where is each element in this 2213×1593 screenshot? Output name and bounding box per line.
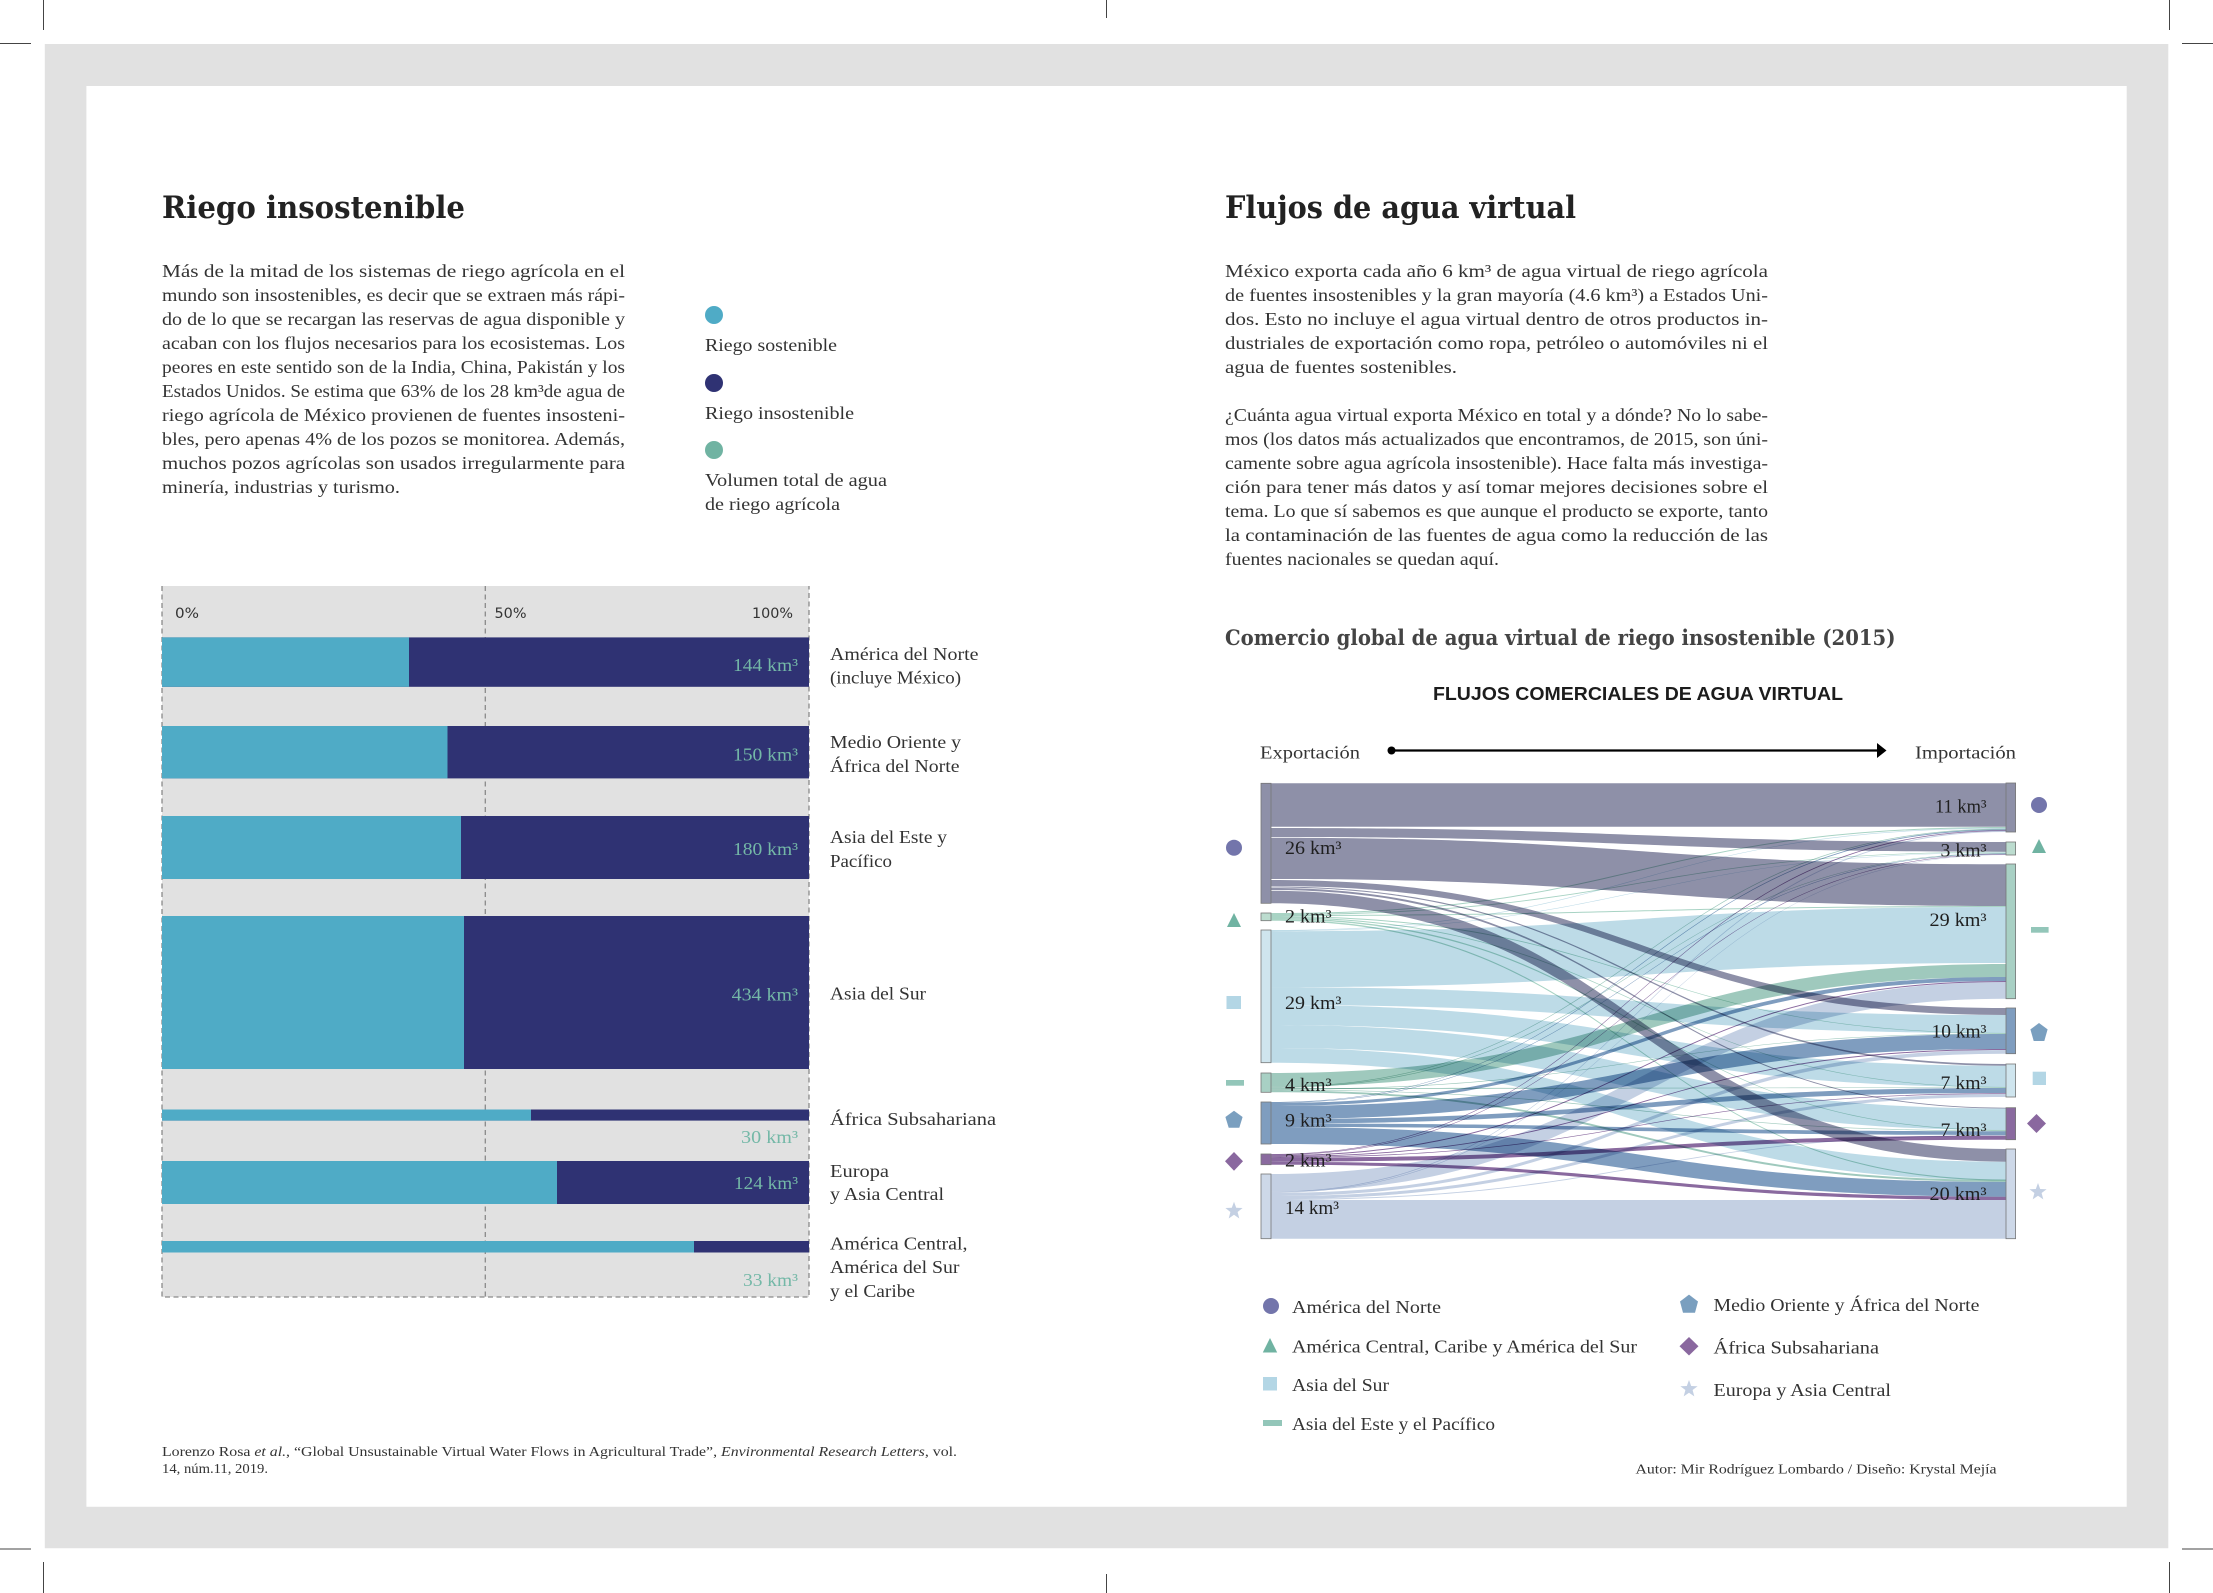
- text block: flujos parrafo 2: tema. Lo que sí sabemos es que aunque el producto se exporte, tanto: [1225, 501, 1768, 521]
- import values: 11 km³: [1935, 798, 1987, 818]
- legend item: volumen total: de riego agrícola: [705, 494, 840, 514]
- bar: Europa y Asia Central: Europa: [830, 1161, 889, 1181]
- legend item: riego sostenible: [705, 306, 837, 355]
- bar: Medio Oriente: África del Norte: [830, 755, 960, 776]
- export values: 29 km³: [1285, 994, 1342, 1014]
- legend: Medio Oriente y África del Norte: Medio Oriente y África del Norte: [1714, 1294, 1980, 1315]
- flows: Asia del Sur: [1271, 828, 2006, 1180]
- text block: flujos parrafo 2: fuentes nacionales se quedan aquí.: [1225, 549, 1499, 569]
- text block: flujos parrafo 1: [1225, 261, 1768, 377]
- heading: Flujos de agua virtual: Flujos de agua virtual: [1225, 190, 1576, 226]
- text block: flujos parrafo 1: dustriales de exportación como ropa, petróleo o automóviles ni el: [1225, 333, 1768, 353]
- text block: riego: muchos pozos agrícolas son usados irregularmente para: [162, 453, 625, 473]
- label: exportación: Exportación: [1260, 743, 1360, 763]
- bar: Asia del Este: 180 km³: [733, 839, 799, 859]
- flows: África Subsahariana: [1271, 830, 2006, 1200]
- sankey chart: [1225, 783, 2049, 1239]
- bar: Medio Oriente: [162, 726, 961, 778]
- export values: 9 km³: [1285, 1112, 1332, 1132]
- label: importación: Importación: [1915, 743, 2016, 763]
- axis labels: 100%: [752, 606, 793, 622]
- legend: riego: [705, 306, 887, 514]
- arrow: exportación a importación: [1388, 743, 1886, 758]
- sankey legend: [1263, 1294, 1980, 1434]
- legend: América del Norte: América del Norte: [1292, 1297, 1441, 1317]
- legend: Asia del Este y el Pacífico: Asia del Este y el Pacífico: [1292, 1414, 1495, 1434]
- axis labels: [175, 606, 793, 622]
- legend: África Subsahariana: [1680, 1336, 1879, 1358]
- legend item: volumen total: [705, 441, 887, 514]
- source note: Lorenzo Rosa et al. , “Global Unsustainable Virtual Water Flows in Agricultural Trade”, Environmental Research Letters , vol.: [162, 1445, 957, 1460]
- bar: África Subsahariana: 30 km³: [741, 1127, 799, 1147]
- text block: flujos parrafo 1: de fuentes insostenibles y la gran mayoría (4.6 km³) a Estados Uni-: [1225, 285, 1768, 306]
- legend item: riego sostenible: Riego sostenible: [705, 335, 837, 355]
- flows: Europa y Asia Central: [1271, 831, 2006, 1239]
- bar: América del Norte: (incluye México): [830, 668, 961, 688]
- export values: 2 km³: [1285, 1152, 1332, 1172]
- bar: Europa y Asia Central: 124 km³: [734, 1173, 799, 1193]
- import values: 3 km³: [1940, 842, 1987, 862]
- bar: Asia del Este: Asia del Este y: [830, 827, 947, 847]
- bar: Medio Oriente: Medio Oriente y: [830, 732, 961, 752]
- text block: riego: minería, industrias y turismo.: [162, 477, 400, 497]
- credits: Autor: Mir Rodríguez Lombardo / Diseño: Krystal Mejía: [1636, 1463, 1997, 1478]
- text block: flujos parrafo 2: [1225, 405, 1768, 569]
- chart title: FLUJOS COMERCIALES DE AGUA VIRTUAL: [1433, 684, 1843, 704]
- text block: flujos parrafo 2: la contaminación de las fuentes de agua como la reducción de las: [1225, 525, 1768, 545]
- text block: riego: [162, 261, 625, 497]
- export values: 14 km³: [1285, 1199, 1339, 1219]
- import values: [1930, 798, 1987, 1205]
- bar: Medio Oriente: 150 km³: [733, 744, 799, 764]
- legend item: riego insostenible: [705, 374, 854, 423]
- text block: flujos parrafo 1: México exporta cada año 6 km³ de agua virtual de riego agrícola: [1225, 261, 1768, 281]
- bar: América Central y del Sur: América Central,: [830, 1234, 968, 1254]
- text block: riego: do de lo que se recargan las reservas de agua disponible y: [162, 309, 625, 329]
- export values: 2 km³: [1285, 908, 1332, 928]
- text block: flujos parrafo 2: ción para tener más datos y así tomar mejores decisiones sobre el: [1225, 477, 1768, 497]
- text block: riego: riego agrícola de México provienen de fuentes insosteni-: [162, 405, 625, 425]
- subheading: comercio global: Comercio global de agua virtual de riego insostenible (2015): [1225, 625, 1896, 650]
- bar: Europa y Asia Central: [162, 1161, 944, 1204]
- flows: América Central: [1271, 827, 2006, 1180]
- flows: Asia del Este y Pacífico: [1271, 829, 2006, 1182]
- import values: 29 km³: [1930, 911, 1987, 931]
- text block: flujos parrafo 2: ¿Cuánta agua virtual exporta México en total y a dónde? No lo sabe-: [1225, 405, 1768, 425]
- legend item: riego insostenible: Riego insostenible: [705, 403, 854, 423]
- bar: América del Norte: 144 km³: [733, 655, 799, 675]
- legend: América Central, Caribe y América del Sur: América Central, Caribe y América del Sur: [1292, 1336, 1637, 1356]
- bar: Europa y Asia Central: y Asia Central: [830, 1184, 944, 1204]
- text block: flujos parrafo 2: camente sobre agua agrícola insostenible). Hace falta más investiga-: [1225, 453, 1768, 474]
- legend: África Subsahariana: África Subsahariana: [1714, 1336, 1879, 1358]
- text block: riego: mundo son insostenibles, es decir que se extraen más rápi-: [162, 285, 625, 305]
- bar: Asia del Sur: Asia del Sur: [830, 984, 926, 1004]
- text block: flujos parrafo 2: mos (los datos más actualizados que encontramos, de 2015, son úni-: [1225, 429, 1768, 450]
- bar: América del Norte: [162, 637, 979, 688]
- bar: América Central y del Sur: [162, 1234, 968, 1301]
- export region icons: [1225, 840, 1244, 1218]
- bar: África Subsahariana: [162, 1108, 996, 1147]
- bar: Asia del Sur: [162, 916, 926, 1069]
- flows: América del Norte: [1271, 783, 2006, 1162]
- text block: riego: acaban con los flujos necesarios para los ecosistemas. Los: [162, 333, 625, 353]
- text block: riego: Más de la mitad de los sistemas de riego agrícola en el: [162, 261, 625, 281]
- import values: 7 km³: [1940, 1121, 1987, 1141]
- bar: Asia del Este: Pacífico: [830, 851, 892, 871]
- source note: [162, 1445, 957, 1477]
- export values: 26 km³: [1285, 839, 1342, 859]
- export values: [1285, 839, 1342, 1219]
- text block: flujos parrafo 1: agua de fuentes sostenibles.: [1225, 357, 1457, 377]
- import values: 10 km³: [1932, 1023, 1987, 1043]
- bar chart: riego sostenible e insostenible: [162, 586, 996, 1301]
- source note: 14, núm.11, 2019.: [162, 1462, 268, 1477]
- text block: flujos parrafo 1: dos. Esto no incluye el agua virtual dentro de otros productos in-: [1225, 309, 1768, 329]
- import region icons: [2027, 797, 2049, 1199]
- legend: Europa y Asia Central: Europa y Asia Central: [1714, 1380, 1891, 1400]
- export values: 4 km³: [1285, 1076, 1332, 1096]
- flows: Medio Oriente y África del Norte: [1271, 829, 2006, 1197]
- legend item: volumen total: Volumen total de agua: [705, 470, 887, 490]
- bar: América Central y del Sur: 33 km³: [743, 1270, 799, 1290]
- import values: 7 km³: [1940, 1074, 1987, 1094]
- import values: 20 km³: [1930, 1185, 1987, 1205]
- text block: riego: peores en este sentido son de la India, China, Pakistán y los: [162, 357, 625, 377]
- heading: Riego insostenible: Riego insostenible: [162, 190, 465, 226]
- export nodes: [1261, 783, 1271, 1239]
- axis labels: 0%: [175, 606, 199, 622]
- bar: América del Norte: América del Norte: [830, 644, 979, 664]
- bar: América Central y del Sur: América del Sur: [830, 1257, 960, 1277]
- legend: Asia del Sur: Asia del Sur: [1292, 1375, 1389, 1395]
- bar: Asia del Sur: 434 km³: [732, 984, 799, 1004]
- axis labels: 50%: [494, 606, 526, 622]
- bar: Asia del Este: [162, 816, 947, 879]
- text block: riego: Estados Unidos. Se estima que 63% de los 28 km³de agua de: [162, 381, 625, 401]
- import nodes: [2006, 783, 2016, 1239]
- text block: riego: bles, pero apenas 4% de los pozos se monitorea. Además,: [162, 429, 625, 449]
- bar: África Subsahariana: África Subsahariana: [830, 1108, 996, 1129]
- bar: América Central y del Sur: y el Caribe: [830, 1281, 915, 1301]
